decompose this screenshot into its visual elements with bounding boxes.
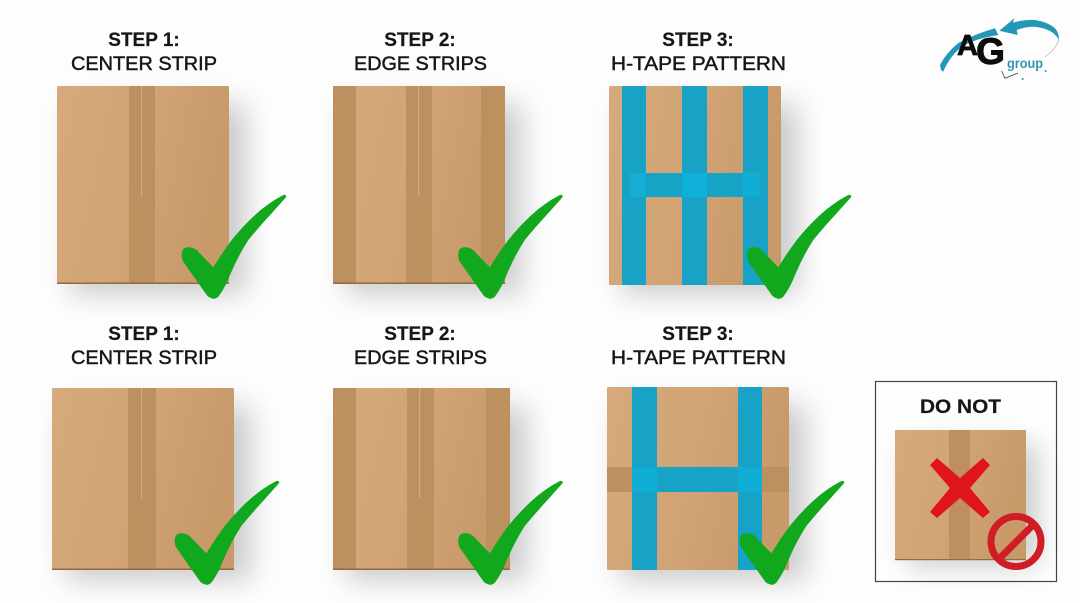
logo letters AG: G [976,31,1005,72]
heading: step 1 center strip [71,30,217,75]
heading: step 1 center strip: STEP 1: [108,324,180,345]
box: center strip [57,86,246,294]
icon: green check [182,195,286,299]
panel: row 2 step 1 center strip [52,324,279,585]
heading: step 3 h-tape pattern: STEP 3: [662,324,734,345]
heading: step 3 h-tape pattern: H-TAPE PATTERN [611,54,786,75]
heading: step 2 edge strips: EDGE STRIPS [354,54,487,75]
icon: red x [930,458,990,518]
panel: do not [876,382,1056,582]
heading: step 1 center strip [71,324,217,369]
logo: AG group [940,18,1059,80]
icon: green check [740,481,844,585]
heading: step 3 h-tape pattern: STEP 3: [662,30,734,51]
heading: step 1 center strip: CENTER STRIP [71,54,217,75]
heading: step 2 edge strips [354,30,487,75]
heading: step 2 edge strips: STEP 2: [384,324,456,345]
panel: row 2 step 3 h-tape pattern [607,324,844,585]
heading: step 3 h-tape pattern: H-TAPE PATTERN [611,348,786,369]
logo letters AG [957,30,1005,72]
logo letters AG: A [957,30,978,62]
heading: step 3 h-tape pattern [611,324,786,369]
box: blue h-tape three strips [609,86,798,294]
panel: row 2 step 2 edge strips [333,324,563,585]
heading: step 2 edge strips: EDGE STRIPS [354,348,487,369]
logo dots [1022,70,1047,80]
icon: green check [458,481,563,585]
panel: row 1 step 1 center strip [57,30,286,299]
panel: row 1 step 2 edge strips [333,30,563,299]
logo arrowhead arc [999,18,1059,40]
box: center strip [52,388,251,580]
icon: green check [458,195,563,299]
box: edge strips [333,388,527,580]
icon: green check [175,481,279,585]
panel: row 1 step 3 h-tape pattern [609,30,851,299]
box: edge strips [333,86,522,294]
box: blue h-tape two strips [607,387,806,580]
icon: green check [747,195,851,299]
heading: step 2 edge strips [354,324,487,369]
heading: step 2 edge strips: STEP 2: [384,30,456,51]
logo thin arc [1045,40,1059,57]
box: wrong single strip [895,430,1038,566]
heading: step 1 center strip: STEP 1: [108,30,180,51]
logo arrow swoosh [940,28,998,72]
logo small dark wedge [1002,71,1018,78]
icon: prohibition sign [991,516,1041,566]
heading: do not: DO NOT [920,397,1001,418]
panel frame [876,382,1056,582]
heading: step 3 h-tape pattern [611,30,786,75]
logo word group: group [1007,55,1043,71]
heading: step 1 center strip: CENTER STRIP [71,348,217,369]
